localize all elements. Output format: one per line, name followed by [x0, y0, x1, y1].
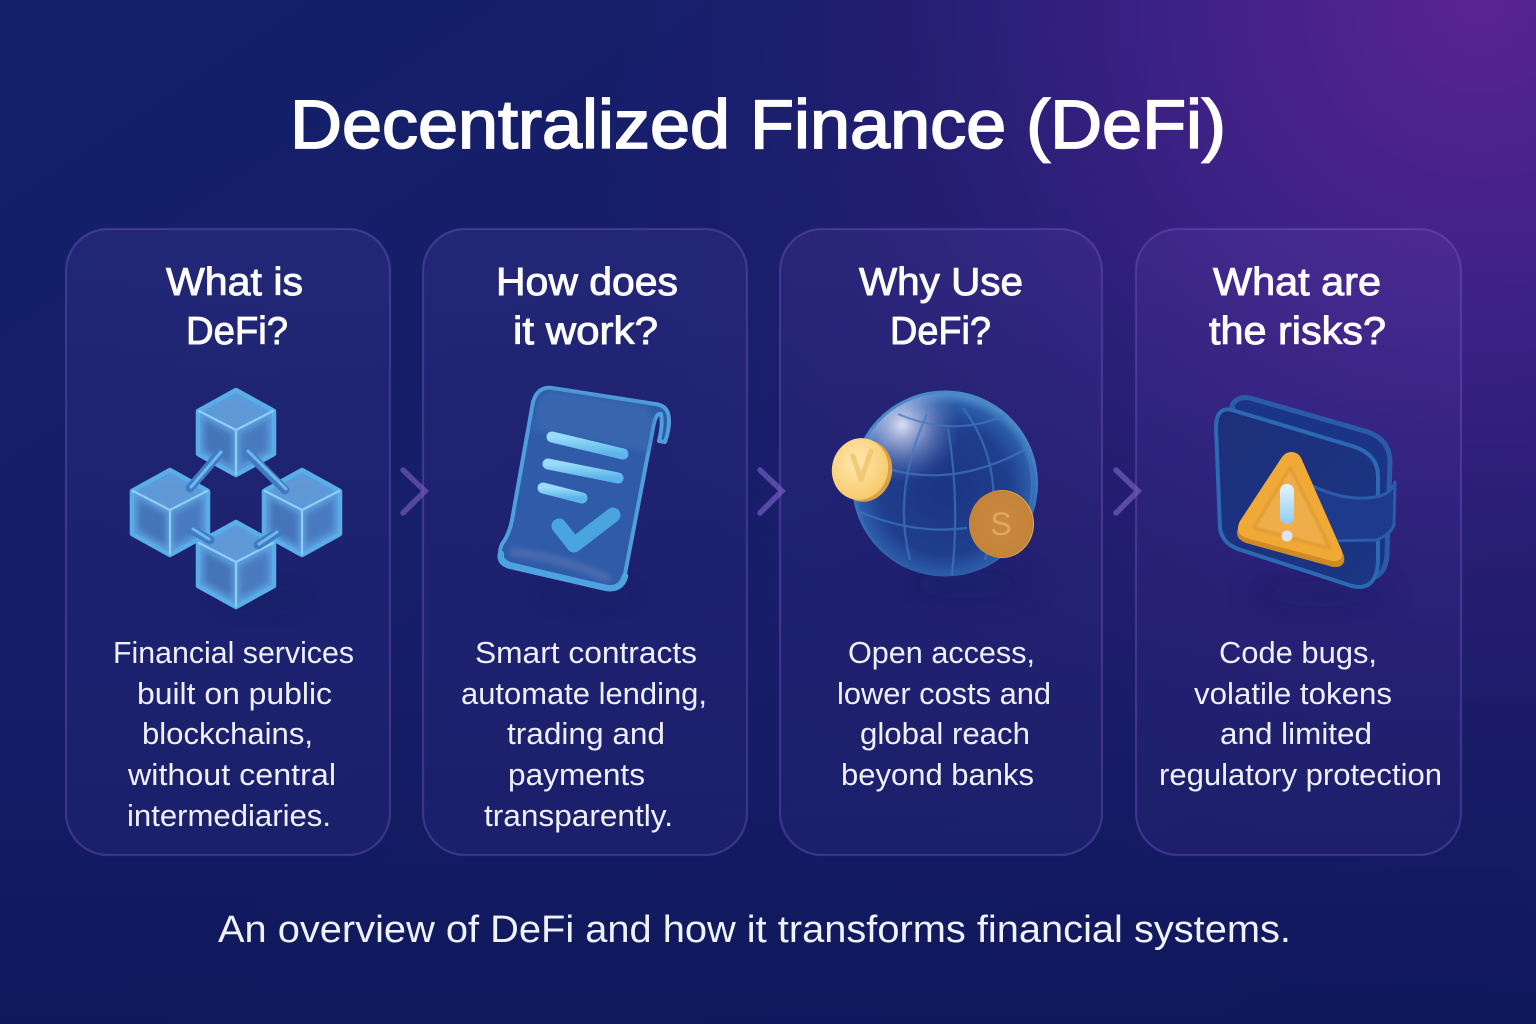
heading: what is DeFi	[166, 261, 303, 353]
text: how does it work description: payments	[508, 757, 645, 792]
coin: dollar	[969, 490, 1034, 558]
globe	[852, 390, 1038, 576]
icon: smart contract scroll	[500, 388, 669, 603]
heading: what are the risks: What are	[1213, 261, 1381, 304]
arrow 1	[403, 470, 425, 513]
text: why use DeFi description: lower costs and	[837, 676, 1051, 711]
text: what is DeFi description: blockchains,	[142, 716, 313, 751]
text: how does it work description: transparently.	[484, 798, 673, 833]
text: what is DeFi description	[113, 635, 354, 833]
arrow 3	[1116, 470, 1138, 513]
text: what is DeFi description: without central	[127, 757, 336, 792]
text: what are the risks description: and limited	[1220, 716, 1372, 751]
heading: what is DeFi: What is	[166, 261, 303, 304]
text: what are the risks description	[1159, 635, 1442, 792]
heading: how does it work	[496, 261, 678, 353]
text: how does it work description	[461, 635, 707, 833]
heading: what is DeFi: DeFi?	[186, 310, 288, 353]
coin: light gold	[825, 432, 899, 508]
text: what is DeFi description: intermediaries.	[127, 798, 331, 833]
wallet	[1216, 398, 1395, 587]
panel: what are the risks	[1136, 229, 1461, 855]
icon: connected blockchain cubes	[132, 390, 340, 608]
text: why use DeFi description	[837, 635, 1051, 792]
icon: wallet with warning triangle	[1216, 398, 1395, 601]
heading: why use DeFi	[859, 261, 1023, 353]
coin: dollar: S	[990, 506, 1012, 542]
text: why use DeFi description: global reach	[860, 716, 1030, 751]
heading: how does it work: How does	[496, 261, 678, 304]
text: what are the risks description: Code bugs,	[1219, 635, 1377, 670]
text: why use DeFi description: Open access,	[848, 635, 1035, 670]
panel: how does it work	[423, 229, 747, 855]
text: why use DeFi description: beyond banks	[841, 757, 1034, 792]
text: what are the risks description: volatile tokens	[1194, 676, 1392, 711]
text: how does it work description: Smart contracts	[475, 635, 697, 670]
text: what is DeFi description: built on public	[137, 676, 332, 711]
text: how does it work description: trading and	[507, 716, 665, 751]
heading: why use DeFi: DeFi?	[890, 310, 991, 353]
icon: globe with coins	[832, 390, 1038, 576]
title: Decentralized Finance (DeFi)	[290, 86, 1226, 163]
panel: what is DeFi	[66, 229, 390, 855]
heading: how does it work: it work?	[513, 310, 658, 353]
text: what are the risks description: regulatory protection	[1159, 757, 1442, 792]
panel: why use DeFi	[780, 229, 1102, 855]
heading: what are the risks	[1209, 261, 1386, 353]
text: how does it work description: automate lending,	[461, 676, 707, 711]
heading: what are the risks: the risks?	[1209, 310, 1386, 353]
footer caption: An overview of DeFi and how it transforms financial systems.	[218, 909, 1291, 951]
arrow 2	[760, 470, 782, 513]
warning triangle	[1237, 452, 1344, 567]
text: what is DeFi description: Financial services	[113, 635, 354, 670]
heading: why use DeFi: Why Use	[859, 261, 1023, 304]
